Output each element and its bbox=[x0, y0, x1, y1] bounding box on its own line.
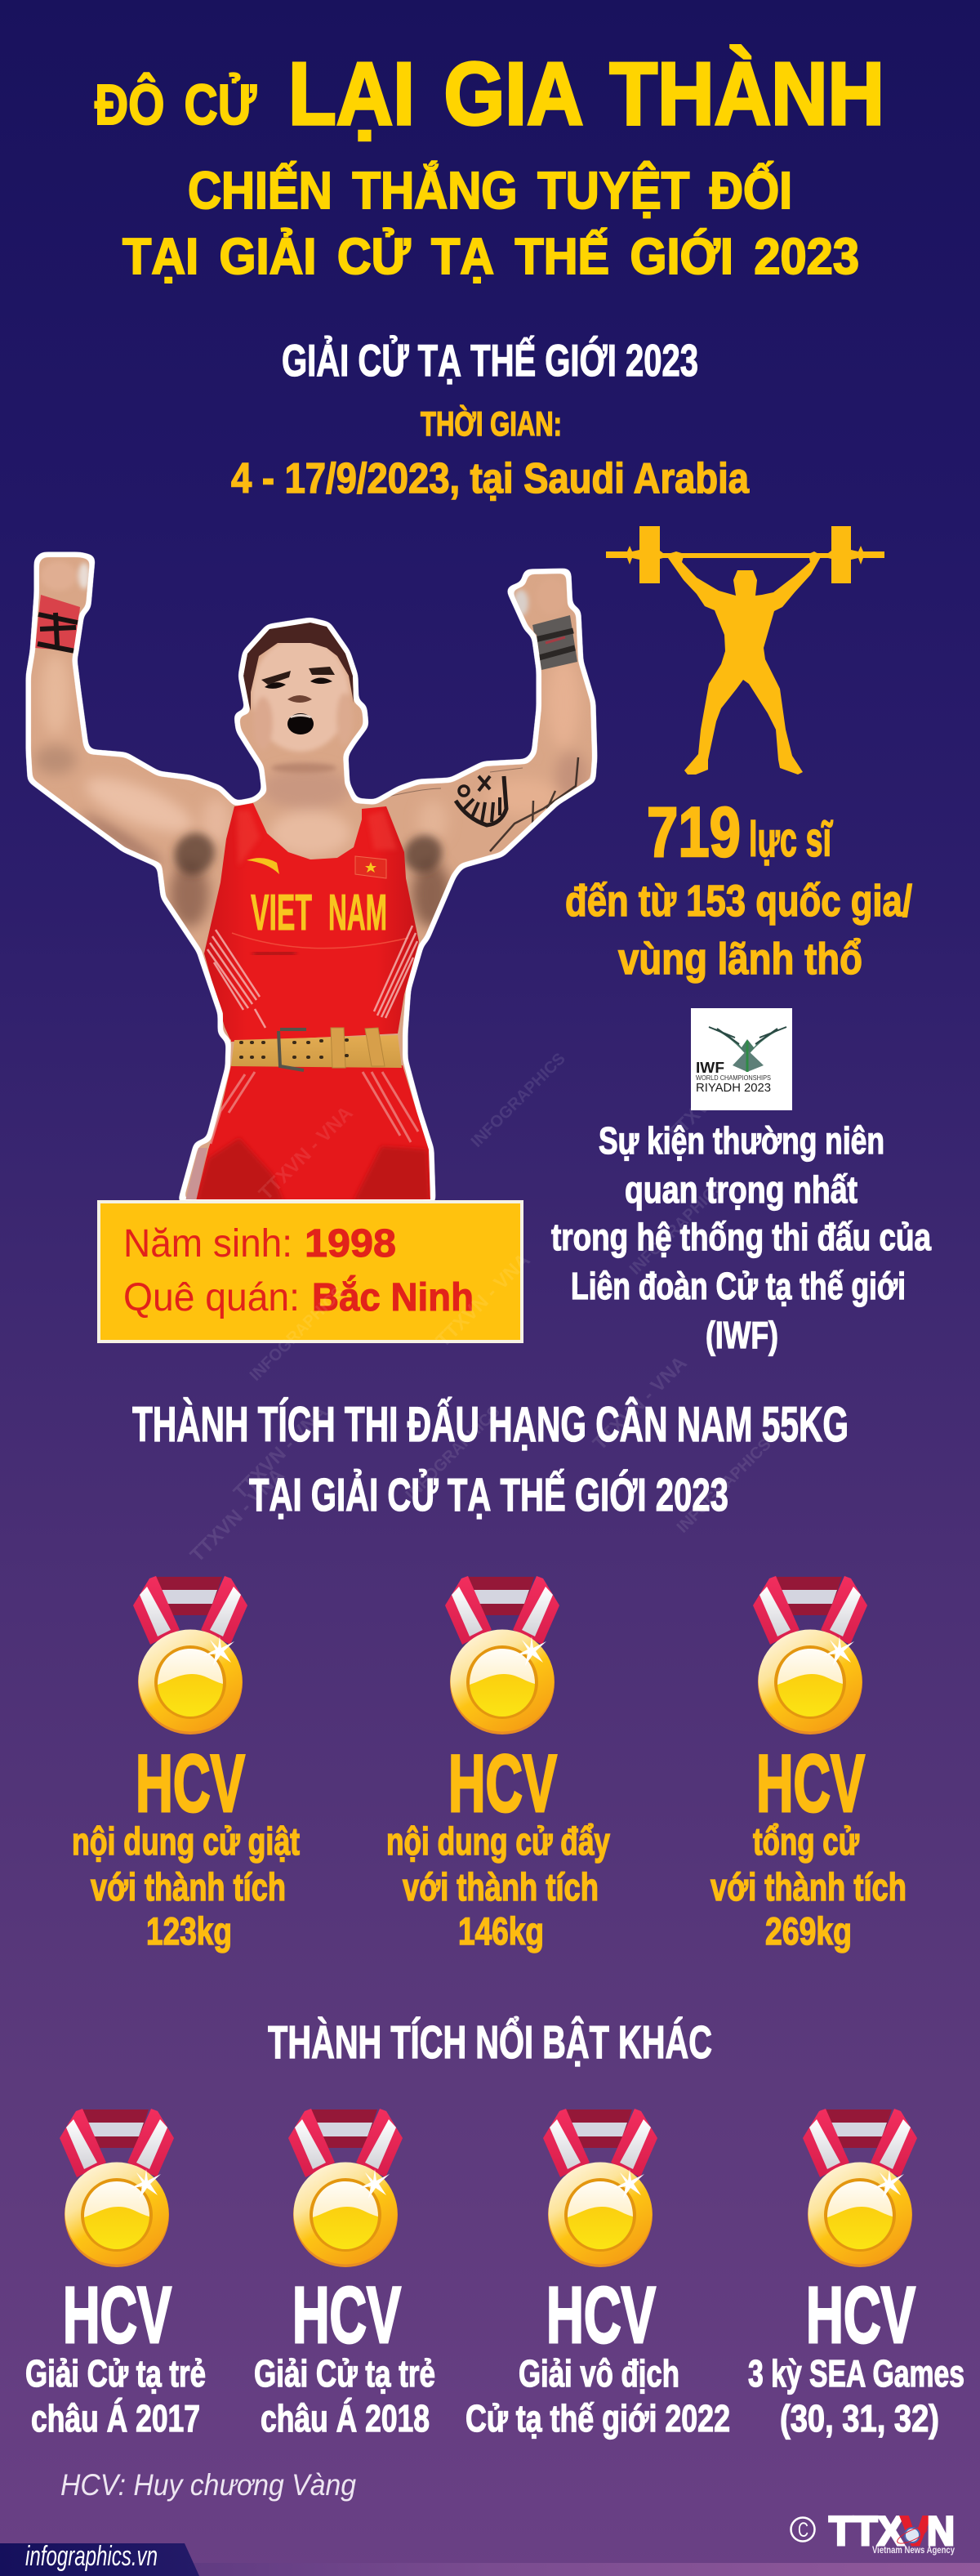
number 719: 719 bbox=[647, 793, 741, 872]
logo: TTXVN copyright: TTX bbox=[829, 2508, 904, 2554]
HCV label: HCV bbox=[136, 1738, 245, 1828]
achievement line 2: (30, 31, 32) bbox=[780, 2397, 939, 2440]
with result: với thành tích bbox=[91, 1865, 286, 1909]
watermark: INFOGRAPHICS bbox=[674, 1435, 775, 1537]
panel: world championships 2022 bbox=[466, 2109, 730, 2440]
HCV label: HCV bbox=[63, 2270, 172, 2359]
logo: TTXVN copyright: V bbox=[901, 2508, 931, 2554]
icon: medal bbox=[803, 2109, 917, 2267]
result: 123kg bbox=[146, 1909, 232, 1953]
event: tổng cử bbox=[753, 1819, 860, 1863]
achievement line 1: Giải vô địch bbox=[519, 2352, 679, 2395]
watermark: INFOGRAPHICS bbox=[626, 1177, 728, 1279]
watermark: INFOGRAPHICS bbox=[403, 1403, 504, 1504]
singlet bbox=[204, 803, 419, 1042]
HCV label: HCV bbox=[546, 2270, 656, 2359]
achievement line 2: châu Á 2018 bbox=[261, 2397, 430, 2440]
title bbox=[95, 44, 884, 285]
achievement line 2: châu Á 2017 bbox=[31, 2397, 200, 2440]
result: 269kg bbox=[765, 1909, 852, 1953]
footer tab bbox=[0, 2543, 199, 2576]
description line 1: Sự kiện thường niên bbox=[599, 1119, 884, 1162]
heading line 2: TẠI GIẢI CỬ TẠ THẾ GIỚI 2023 bbox=[249, 1468, 728, 1521]
logo: TTXVN copyright: N bbox=[927, 2508, 955, 2554]
icon: medal bbox=[288, 2109, 403, 2267]
countries line 2: vùng lãnh thổ bbox=[618, 935, 862, 984]
achievement line 2: Cử tạ thế giới 2022 bbox=[466, 2397, 730, 2440]
shorts bbox=[196, 1065, 430, 1201]
legend note: HCV: Huy chương Vàng bbox=[60, 2468, 356, 2502]
jersey logo bbox=[247, 858, 279, 874]
panel: snatch gold bbox=[72, 1576, 300, 1953]
info box: birth year and hometown bbox=[99, 1202, 522, 1342]
watermark: TTXVN - VNA bbox=[255, 1102, 358, 1205]
wrist band left bbox=[35, 595, 80, 651]
logo: IWF World Championships Riyadh 2023: IWF bbox=[696, 1060, 724, 1076]
eyes and brows bbox=[261, 667, 335, 685]
birth year label: Năm sinh: bbox=[123, 1222, 292, 1266]
logo: TTXVN copyright bbox=[791, 2508, 955, 2556]
title line 1 prefix: ĐÔ CỬ bbox=[95, 72, 257, 136]
HCV label: HCV bbox=[292, 2270, 401, 2359]
logo: IWF World Championships Riyadh 2023 bbox=[691, 1008, 792, 1110]
hometown: Bắc Ninh bbox=[312, 1275, 474, 1319]
singlet side stripes bbox=[207, 926, 417, 1028]
logo: IWF World Championships Riyadh 2023: WORLD CHAMPIONSHIPS bbox=[696, 1074, 771, 1082]
hometown label: Quê quán: bbox=[123, 1276, 300, 1319]
icon: medal bbox=[60, 2109, 174, 2267]
belt bbox=[231, 1035, 402, 1068]
title line 2: CHIẾN THẮNG TUYỆT ĐỐI bbox=[188, 160, 792, 220]
title athlete name: LẠI GIA THÀNH bbox=[288, 44, 884, 144]
nose and mouth bbox=[287, 695, 312, 703]
panel: Asian youth 2017 bbox=[25, 2109, 206, 2440]
with result: với thành tích bbox=[403, 1865, 599, 1909]
athlete photo: Lại Gia Thành bbox=[31, 557, 592, 1201]
description line 2: quan trọng nhất bbox=[625, 1168, 858, 1211]
watermark: TTXVN - VNA bbox=[432, 1249, 535, 1352]
hair bbox=[243, 619, 354, 711]
watermark: TTXVN - VNA bbox=[229, 1401, 332, 1504]
panel: SEA Games bbox=[748, 2109, 964, 2440]
footer site name: infographics.vn bbox=[25, 2541, 158, 2572]
biceps tattoo bbox=[388, 757, 578, 851]
event date and location: 4 - 17/9/2023, tại Saudi Arabia bbox=[231, 455, 750, 502]
panel: clean and jerk gold bbox=[386, 1576, 610, 1953]
icon: medal bbox=[753, 1576, 867, 1734]
logo: TTXVN copyright: Vietnam News Agency bbox=[872, 2544, 955, 2556]
description line 5: (IWF) bbox=[706, 1314, 778, 1356]
section heading: other achievements: THÀNH TÍCH NỔI BẬT KHÁC bbox=[268, 2016, 712, 2069]
jersey lettering: VIET bbox=[251, 885, 312, 941]
logo: IWF World Championships Riyadh 2023: RIYADH 2023 bbox=[696, 1081, 771, 1095]
icon: medal bbox=[543, 2109, 657, 2267]
icon: weightlifter silhouette bbox=[606, 526, 884, 775]
watermark bbox=[186, 1043, 775, 1567]
achievement line 1: Giải Cử tạ trẻ bbox=[254, 2352, 435, 2395]
panel: total gold bbox=[710, 1576, 906, 1953]
with result: với thành tích bbox=[710, 1865, 906, 1909]
section heading: 55kg results bbox=[132, 1397, 849, 1521]
HCV label: HCV bbox=[756, 1738, 865, 1828]
watermark: TTXVN - VNA bbox=[186, 1464, 289, 1567]
HCV label: HCV bbox=[806, 2270, 915, 2359]
watermark: TTXVN - VNA bbox=[663, 1043, 766, 1146]
panel: Asian youth 2018 bbox=[254, 2109, 435, 2440]
icon: medal bbox=[133, 1576, 247, 1734]
HCV label: HCV bbox=[448, 1738, 557, 1828]
wrist band right bbox=[532, 615, 577, 670]
athlete photo: Lại Gia Thành: NAM bbox=[328, 885, 387, 941]
birth year: 1998 bbox=[305, 1222, 396, 1266]
footer band bbox=[0, 2563, 980, 2576]
time label: THỜI GIAN: bbox=[421, 404, 562, 443]
achievement line 1: Giải Cử tạ trẻ bbox=[25, 2352, 206, 2395]
event heading: GIẢI CỬ TẠ THẾ GIỚI 2023 bbox=[282, 335, 698, 386]
watermark: INFOGRAPHICS bbox=[468, 1050, 569, 1151]
title line 3: TẠI GIẢI CỬ TẠ THẾ GIỚI 2023 bbox=[122, 229, 859, 285]
event: nội dung cử giật bbox=[72, 1819, 300, 1863]
athlete count bbox=[565, 793, 912, 984]
icon: medal bbox=[445, 1576, 559, 1734]
jersey flag bbox=[355, 856, 386, 878]
label lực sĩ: lực sĩ bbox=[749, 812, 833, 867]
watermark: INFOGRAPHICS bbox=[247, 1284, 348, 1385]
watermark: TTXVN - VNA bbox=[589, 1352, 692, 1455]
event description bbox=[551, 1119, 931, 1356]
result: 146kg bbox=[458, 1909, 544, 1953]
logo: TTXVN copyright: C bbox=[798, 2519, 808, 2542]
event: nội dung cử đẩy bbox=[386, 1819, 610, 1863]
